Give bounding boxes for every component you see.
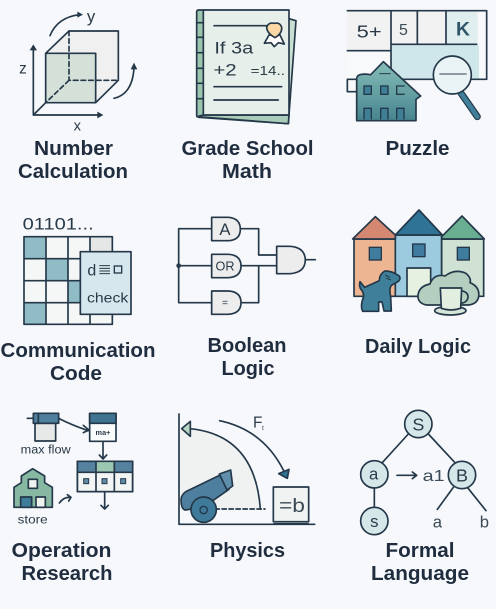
icon: parse tree: a: [433, 512, 443, 531]
panel: Daily Logic: [353, 210, 484, 358]
icon: number grid, house and magnifier: [347, 11, 487, 121]
icon: cannon and force arcs: t: [262, 425, 264, 432]
icon: workbook with ribbon: =14..: [251, 63, 285, 78]
icon: flow diagram with store: max flow: [21, 443, 71, 457]
icon: parse tree: b: [480, 512, 489, 531]
icon: cannon and force arcs: [179, 414, 315, 524]
panel: Puzzle: [347, 11, 487, 160]
icon: binary grid with check card: d: [87, 262, 96, 279]
heading: Puzzle: Puzzle: [386, 137, 450, 160]
icon: logic gate circuit: A: [219, 220, 231, 239]
heading: Grade School Math: Math: [222, 160, 272, 183]
icon: cannon and force arcs: F: [253, 414, 262, 431]
icon: parse tree: B: [456, 465, 468, 485]
icon: 3D cube on axes: y: [87, 7, 96, 26]
heading: Physics: Physics: [210, 539, 285, 562]
icon: logic gate circuit: OR: [216, 260, 234, 274]
heading: Operation Research: Operation: [12, 539, 112, 562]
panel: Formal Language: [361, 410, 489, 585]
icon: binary grid with check card: 01101...: [23, 214, 94, 233]
icon: workbook with ribbon: If 3a: [214, 39, 254, 58]
panel: Operation Research: [12, 413, 133, 585]
icon: 3D cube on axes: [19, 7, 137, 135]
heading: Daily Logic: Daily Logic: [365, 335, 471, 358]
icon: parse tree: S: [412, 414, 424, 434]
heading: Boolean Logic: Logic: [222, 357, 274, 380]
icon: houses, dog and coffee cup: [353, 210, 484, 315]
heading: Formal Language: Formal: [386, 539, 454, 562]
heading: Number Calculation: Calculation: [18, 160, 128, 183]
icon: binary grid with check card: check: [87, 290, 129, 306]
panel: Communication Code: [0, 214, 156, 385]
heading: Communication Code: Communication: [0, 339, 156, 362]
heading: Grade School Math: Grade School: [182, 137, 314, 160]
icon: parse tree: [361, 410, 489, 535]
icon: parse tree: a1: [423, 468, 445, 485]
heading: Operation Research: Research: [22, 562, 112, 585]
icon: 3D cube on axes: z: [19, 60, 27, 77]
heading: Number Calculation: Number: [34, 137, 113, 160]
icon: number grid, house and magnifier: 5: [399, 22, 408, 39]
panel: Physics: [179, 414, 315, 562]
icon: 3D cube on axes: x: [74, 119, 82, 135]
icon: flow diagram with store: ma+: [96, 428, 110, 437]
icon: workbook with ribbon: [197, 10, 296, 124]
heading: Formal Language: Language: [371, 562, 469, 585]
panel: Number Calculation: [18, 7, 137, 183]
icon: cannon and force arcs: =b: [279, 496, 305, 517]
panel: Grade School Math: [182, 10, 314, 183]
icon: flow diagram with store: store: [18, 512, 48, 526]
icon: logic gate circuit: [176, 217, 315, 314]
icon: flow diagram with store: [14, 413, 133, 526]
heading: Communication Code: Code: [50, 362, 102, 385]
icon: parse tree: s: [370, 512, 378, 531]
icon: workbook with ribbon: +2: [213, 60, 237, 79]
icon: number grid, house and magnifier: 5+: [357, 21, 382, 41]
icon: binary grid with check card: [23, 214, 131, 324]
icon: logic gate circuit: =: [222, 298, 228, 309]
heading: Boolean Logic: Boolean: [208, 334, 286, 357]
icon: number grid, house and magnifier: K: [456, 19, 470, 40]
panel: Boolean Logic: [176, 217, 315, 380]
icon: parse tree: a: [369, 465, 379, 484]
